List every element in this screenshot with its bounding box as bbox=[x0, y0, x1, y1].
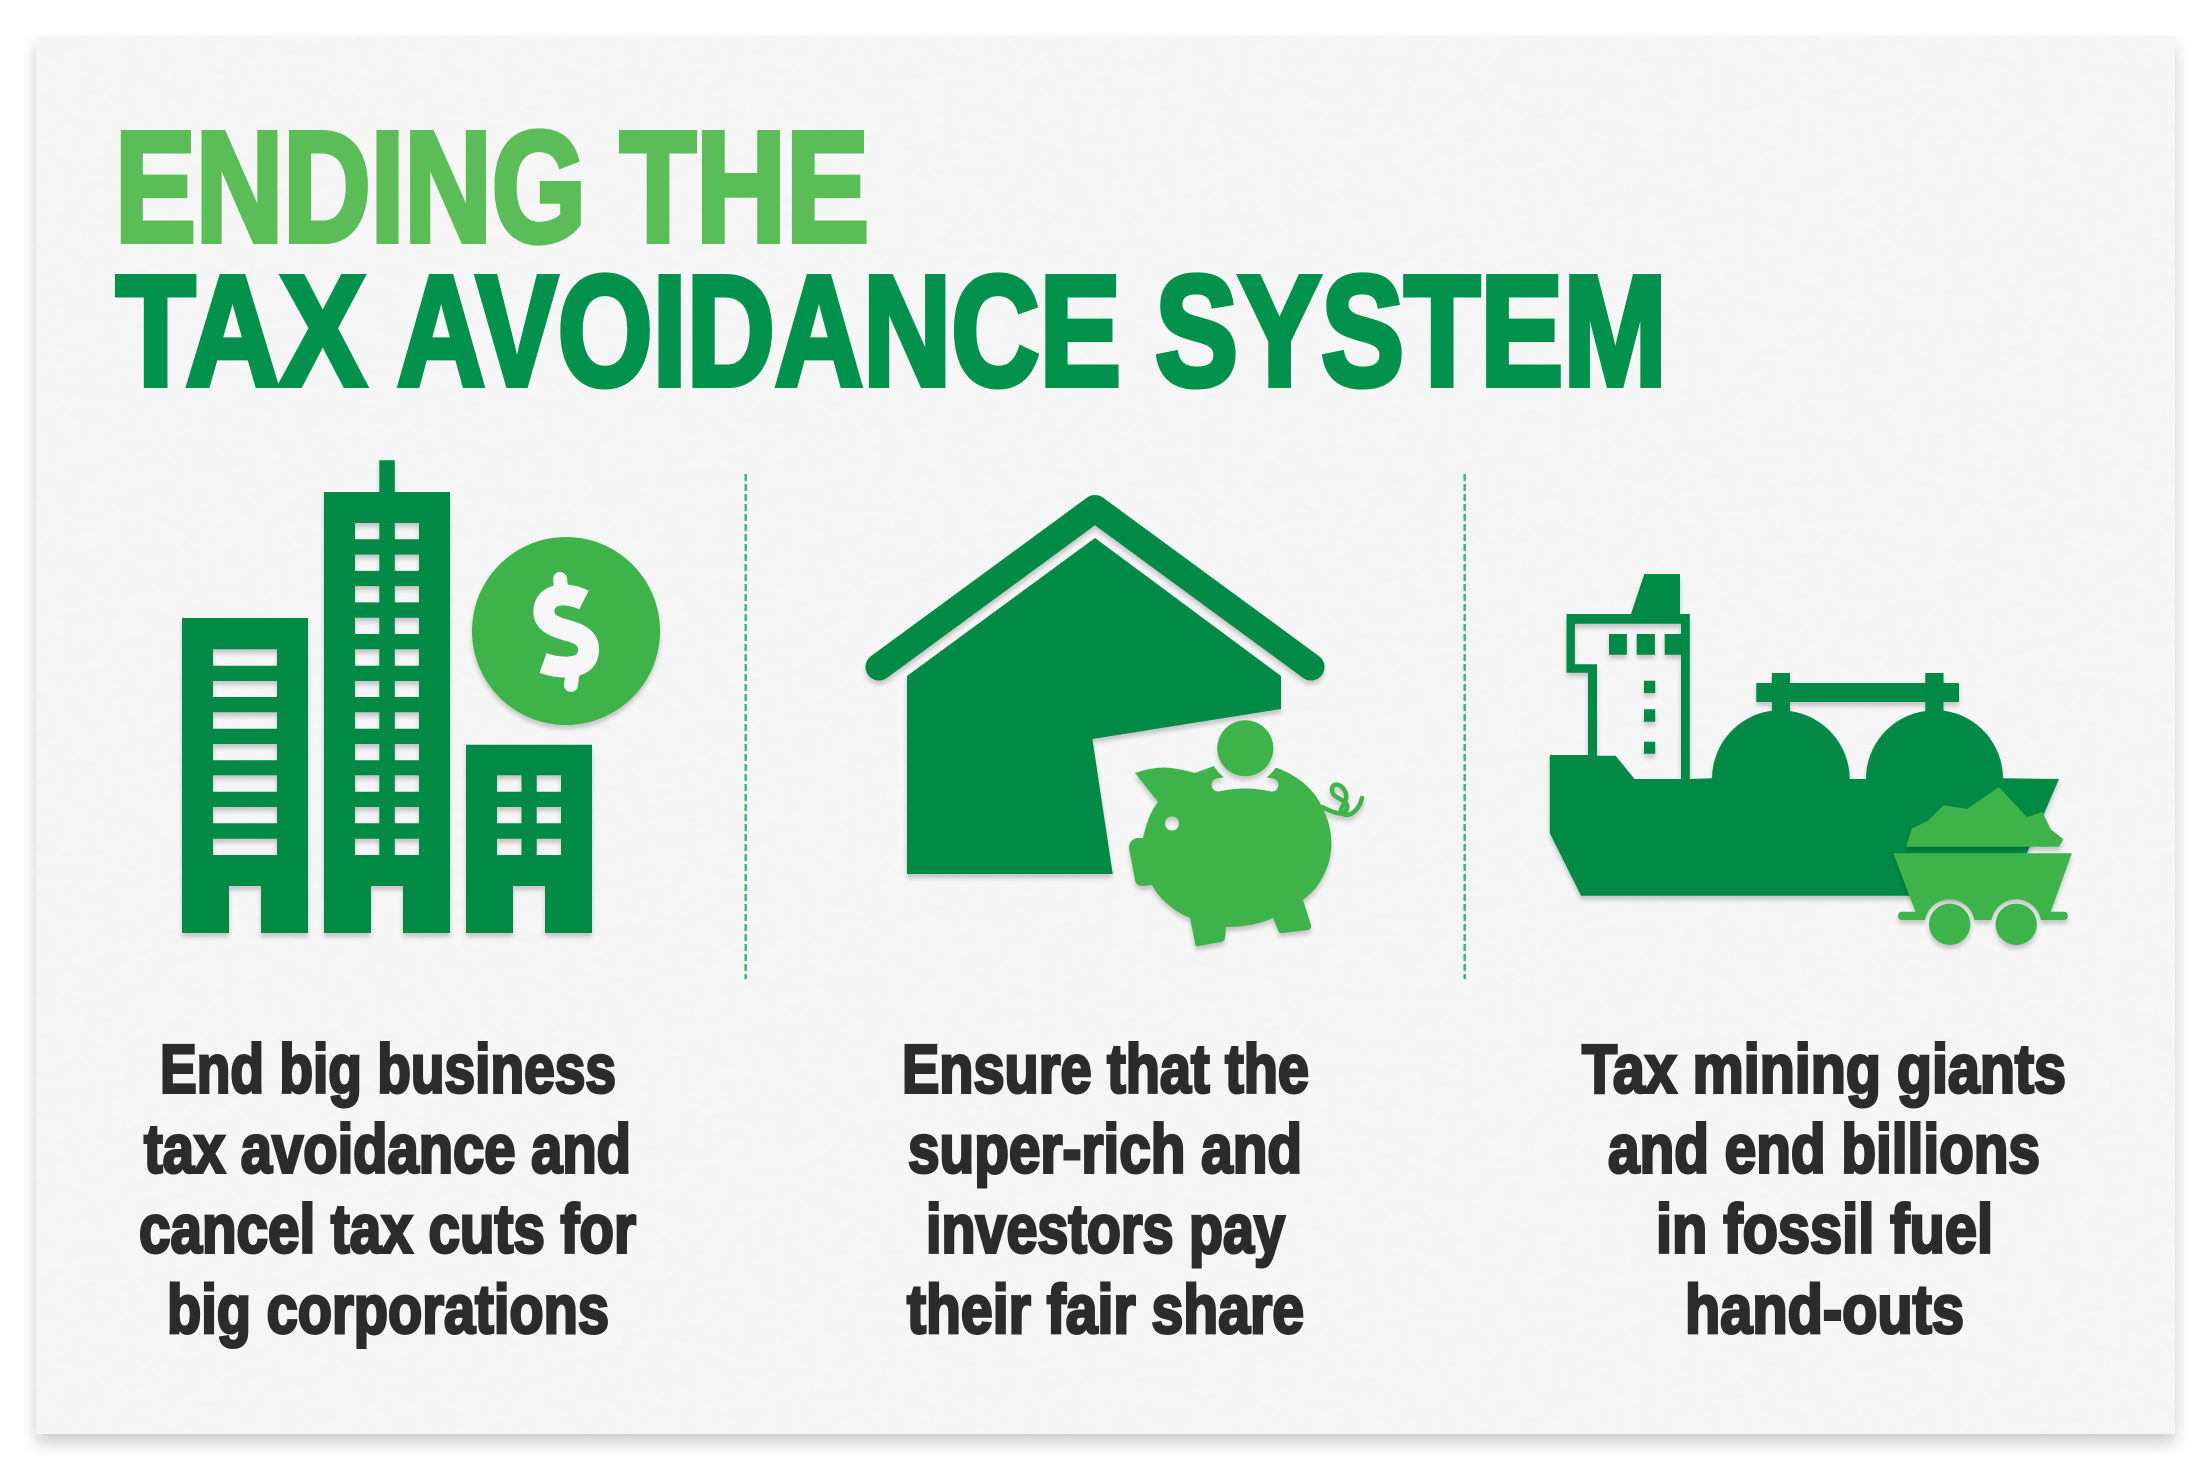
panel: mining and fossil fuel bbox=[1550, 574, 2072, 1348]
text: big business: cancel tax cuts for bbox=[139, 1190, 636, 1268]
text: big business: End big business bbox=[160, 1030, 616, 1108]
title line 2: AVOIDANCE bbox=[397, 244, 1121, 419]
text: big business: tax avoidance and bbox=[144, 1110, 631, 1188]
icon: office buildings bbox=[182, 460, 592, 933]
text: mining and fossil fuel: in fossil fuel bbox=[1656, 1190, 1993, 1268]
text: mining and fossil fuel: hand-outs bbox=[1685, 1271, 1964, 1348]
icon: cargo ship bbox=[1550, 574, 2059, 896]
text: super-rich: super-rich and bbox=[908, 1110, 1302, 1188]
text: super-rich bbox=[902, 1030, 1309, 1348]
title line 2: SYSTEM bbox=[1155, 244, 1667, 419]
panel: big business bbox=[139, 460, 660, 1348]
title line 1: ENDING bbox=[115, 100, 586, 275]
title bbox=[115, 100, 1667, 419]
icon: piggy bank bbox=[1129, 720, 1362, 946]
title line 2: TAX bbox=[116, 244, 366, 419]
text: super-rich: their fair share bbox=[907, 1271, 1304, 1348]
title line 1: THE bbox=[620, 100, 869, 275]
text: big business bbox=[139, 1030, 636, 1348]
icon: dollar coin bbox=[472, 537, 660, 725]
text: mining and fossil fuel bbox=[1582, 1030, 2066, 1348]
icon: house bbox=[879, 508, 1311, 874]
title line 2 bbox=[116, 244, 1667, 419]
text: big business: big corporations bbox=[167, 1271, 609, 1348]
panel: super-rich bbox=[879, 508, 1362, 1348]
text: super-rich: investors pay bbox=[926, 1190, 1285, 1268]
text: mining and fossil fuel: and end billions bbox=[1608, 1110, 2040, 1188]
text: mining and fossil fuel: Tax mining giants bbox=[1582, 1030, 2066, 1108]
icon: coal cart bbox=[1893, 787, 2072, 945]
text: super-rich: Ensure that the bbox=[902, 1030, 1309, 1108]
